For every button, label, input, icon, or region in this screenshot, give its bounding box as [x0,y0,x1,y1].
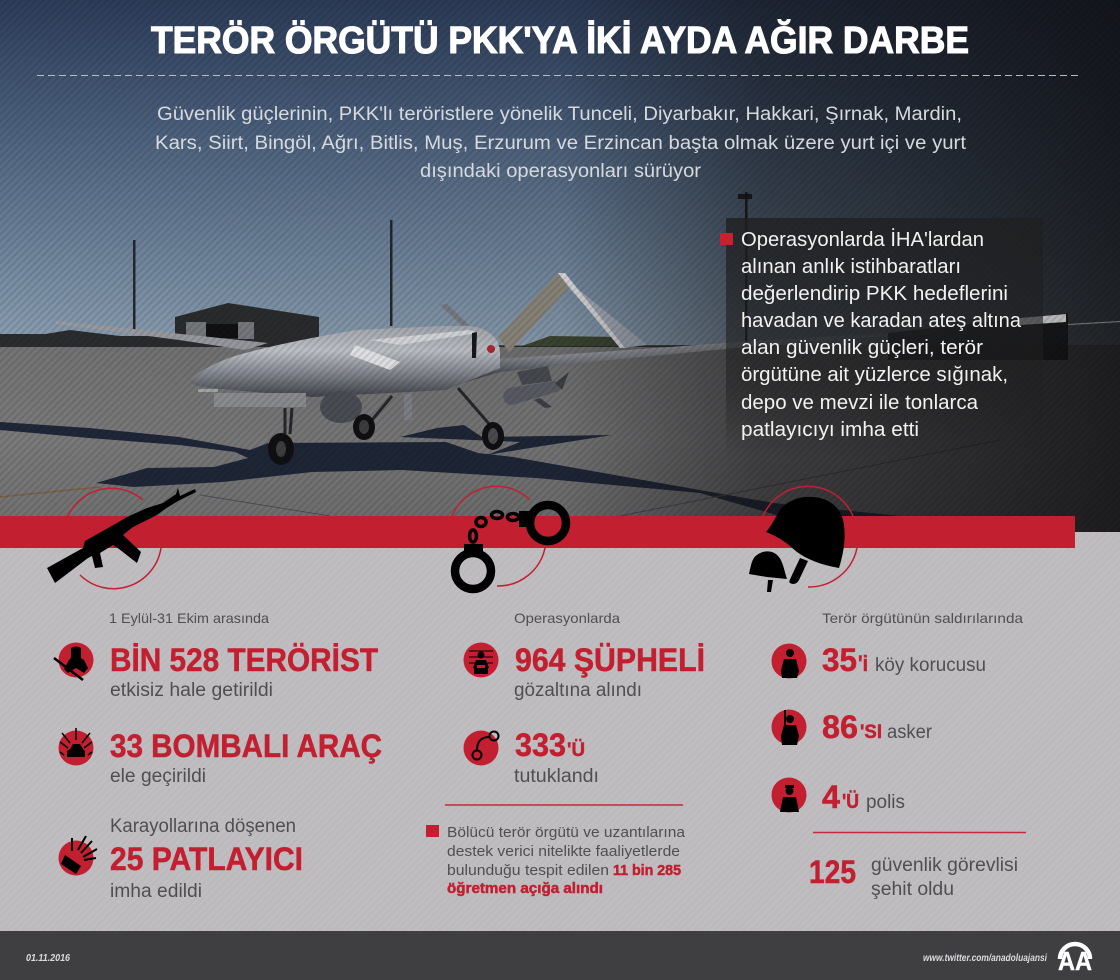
lower panel background [0,516,1120,932]
icon: helmets [749,486,857,592]
column 2: detentions [426,610,705,897]
column 3: casualties [772,610,1026,900]
column 2: detentions: 'Ü [567,740,585,761]
note: suspended teachers: 11 bin 285 [613,863,681,879]
column 3: casualties: şehit oldu [871,879,954,900]
red band [0,516,1075,548]
callout: drone intelligence [720,218,1043,458]
column 3: casualties: 4 [822,779,840,815]
column 3: casualties: 35 [822,642,857,678]
footer: www.twitter.com/anadoluajansi [923,952,1048,964]
icon: village guard [772,644,806,678]
column 3: casualties: 125 [809,854,856,890]
column 2: detentions: Operasyonlarda [514,610,620,626]
icon: small handcuffs [464,730,498,766]
callout: drone intelligence: alan güvenlik güçleri, terör [741,337,983,359]
column 1: operations results: imha edildi [110,881,202,902]
title: TERÖR ÖRGÜTÜ PKK'YA İKİ AYDA AĞIR DARBE [151,18,969,62]
icon: suspect [464,642,498,678]
icon: explosive [58,836,97,876]
column 2: detentions: 333 [515,727,566,763]
column 1: operations results: BİN 528 TERÖRİST [110,642,378,678]
intro text block: Güvenlik güçlerinin, PKK'lı teröristlere yönelik Tunceli, Diyarbakır, Hakkari, Şırnak, Mardin, [157,104,962,125]
icon: Anadolu Agency logo: AA [1058,946,1092,976]
column 2: detentions: 964 ŞÜPHELİ [515,642,705,678]
column 1: operations results [54,610,382,902]
icon: masked terrorist [54,642,94,680]
column 3: casualties: 'i [858,651,868,676]
intro text block [155,104,967,182]
column 3: casualties: 'SI [860,722,882,743]
icon: handcuffs [452,486,566,589]
column 3: casualties: asker [887,722,933,743]
column 3: casualties: 'Ü [842,790,859,813]
footer: 01.11.2016 [26,952,70,964]
column 3: casualties: 86 [822,709,858,745]
icon: soldier [772,710,806,745]
callout: drone intelligence: değerlendirip PKK hedeflerini [741,283,1008,305]
column 1: operations results: ele geçirildi [110,766,206,787]
column 3: casualties: köy korucusu [875,655,986,676]
column 3: casualties: polis [866,792,905,813]
note: suspended teachers [426,825,686,897]
column 1: operations results: 33 BOMBALI ARAÇ [110,728,382,764]
background photo: armed drone on apron [0,0,1120,535]
intro text block: Kars, Siirt, Bingöl, Ağrı, Bitlis, Muş, Erzurum ve Erzincan başta olmak üzere yurt içi ve yurt [155,133,967,154]
column 2: detentions: gözaltına alındı [514,680,642,701]
column 3: casualties: güvenlik görevlisi [871,855,1018,876]
note: suspended teachers: Bölücü terör örgütü ve uzantılarına [447,825,686,841]
column 1: operations results: etkisiz hale getirildi [110,680,273,701]
callout: drone intelligence: depo ve mevzi ile tonlarca [741,392,979,414]
column 1: operations results: 1 Eylül-31 Ekim arasında [109,610,269,626]
note: suspended teachers: bulunduğu tespit edilen [447,863,609,879]
footer [0,931,1120,980]
column 1: operations results: 25 PATLAYICI [110,841,303,877]
callout: drone intelligence: Operasyonlarda İHA'lardan [741,228,984,251]
callout: drone intelligence: havadan ve karadan ateş altına [741,310,1022,332]
callout: drone intelligence: patlayıcıyı imha etti [741,419,919,441]
callout: drone intelligence: örgütüne ait yüzlerce sığınak, [741,364,1008,386]
icon: car bomb [58,728,94,766]
icon: police [772,778,806,812]
column 2: detentions: tutuklandı [514,766,599,787]
column 3: casualties: Terör örgütünün saldırılarında [822,610,1023,626]
intro text block: dışındaki operasyonları sürüyor [420,161,702,182]
icon: rifle [47,488,196,589]
note: suspended teachers: öğretmen açığa alındı [447,881,603,897]
column 1: operations results: Karayollarına döşenen [110,816,296,837]
callout: drone intelligence: alınan anlık istihbaratları [741,256,961,278]
note: suspended teachers: destek verici nitelikte faaliyetlerde [447,844,680,860]
